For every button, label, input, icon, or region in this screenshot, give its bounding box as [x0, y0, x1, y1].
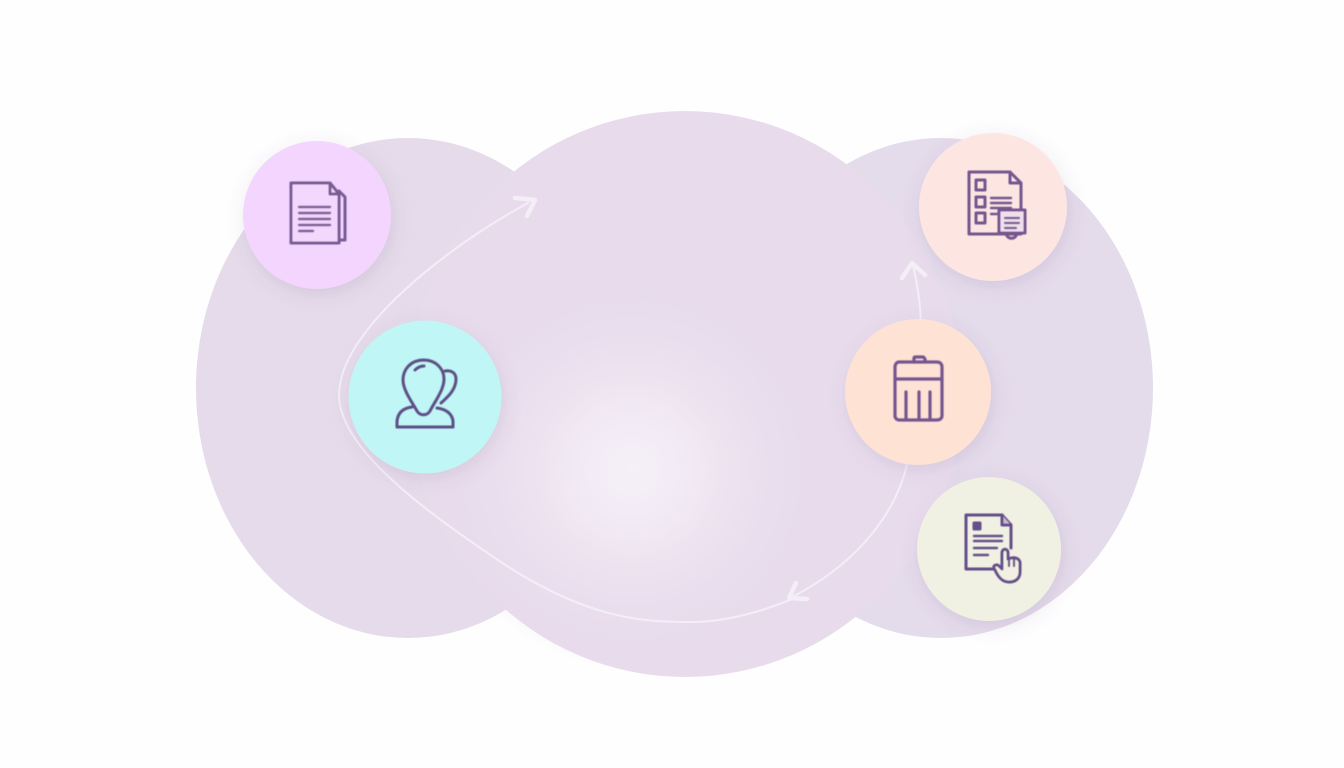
icon: pin on shoulders: [397, 360, 456, 427]
blob: right: [729, 138, 1153, 638]
blob: centre: [408, 111, 962, 677]
arrow: right going up: [902, 263, 925, 322]
centre glow: [432, 270, 832, 670]
arrow: lower right going to bottom: [789, 465, 907, 599]
arrow: left loop up to top: [339, 198, 790, 622]
node: checklist: [919, 133, 1067, 281]
node: lightbulb person: [348, 320, 502, 474]
background blobs: [196, 111, 1153, 677]
node: bin: [845, 319, 991, 465]
icon: bin: [895, 357, 942, 420]
icon: document: [291, 183, 345, 243]
node: document with hand: [917, 477, 1061, 621]
node: document stack: [243, 141, 391, 289]
icon: checklist form: [969, 172, 1025, 238]
icon: document and pointing hand: [966, 515, 1020, 582]
blob: left: [196, 138, 620, 638]
